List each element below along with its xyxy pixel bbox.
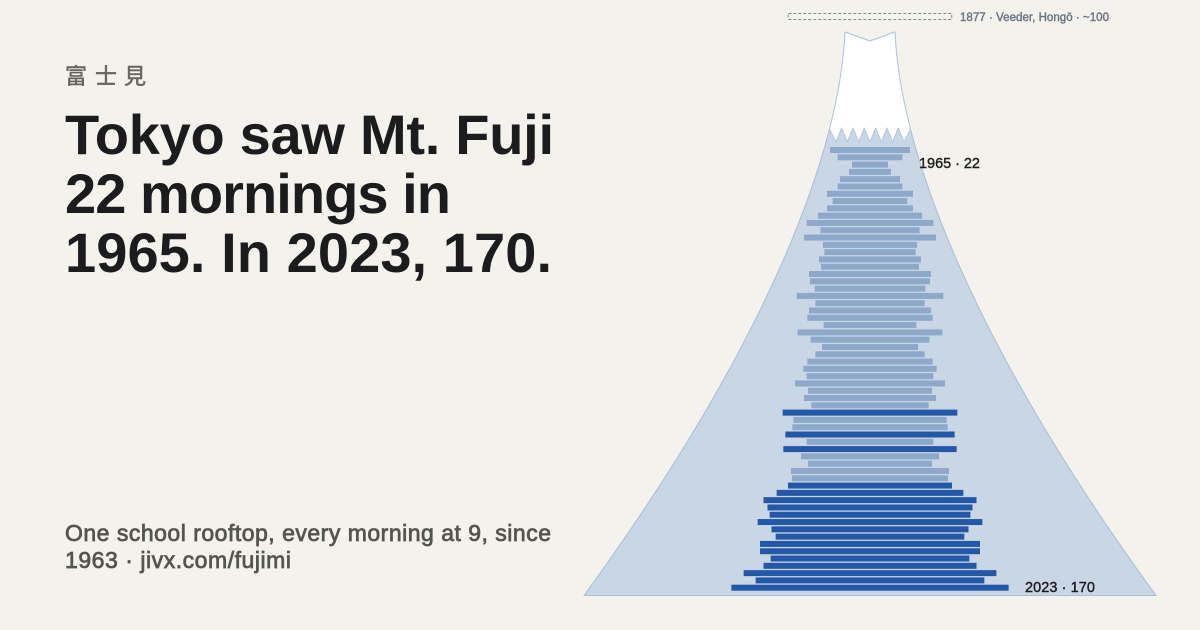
bars: clear mornings per year 1963-2023 [731, 147, 1009, 591]
title [65, 103, 554, 284]
title: 1965. In 2023, 170. [65, 221, 552, 284]
subtitle: 1963 · jivx.com/fujimi [65, 547, 291, 573]
label: 2023 · 170: 2023 · 170 [1025, 580, 1095, 596]
title: 22 mornings in [65, 162, 451, 225]
mountain body [584, 32, 1156, 596]
snow cap [830, 32, 910, 142]
label: 1877 Veeder Hongo: 1877 · Veeder, Hongō · ~100 [960, 12, 1109, 24]
eyebrow: kanji 富士見: 富士見 [65, 64, 146, 89]
subtitle [65, 520, 551, 573]
subtitle: One school rooftop, every morning at 9, since [65, 520, 551, 546]
title: Tokyo saw Mt. Fuji [65, 103, 554, 166]
label: 1965 · 22: 1965 · 22 [919, 156, 980, 172]
1877 reference bar (dashed) [788, 14, 952, 20]
